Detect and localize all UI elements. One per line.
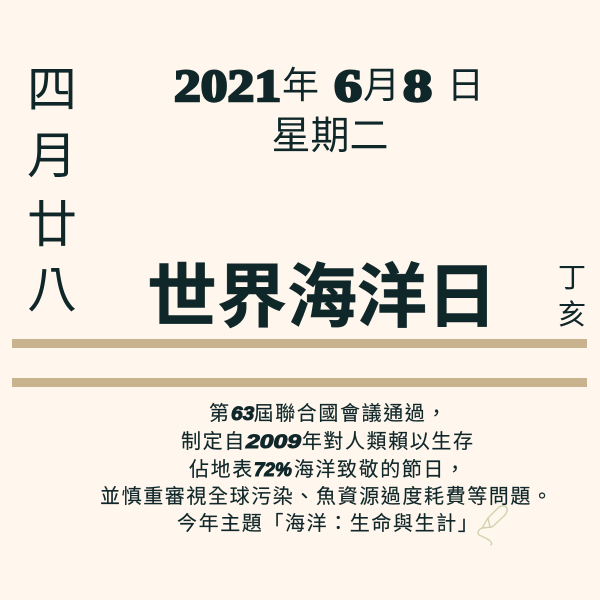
- description text: 72%: [254, 460, 292, 481]
- date line: 月: [363, 65, 400, 106]
- description text: 今年主題「海洋：生命與生計」: [177, 513, 479, 535]
- description text: 第 屆聯合國會議通過，: [209, 403, 448, 425]
- vertical lunar date: [27, 62, 77, 318]
- vertical lunar date: 廿: [27, 197, 77, 253]
- date line: 年: [282, 65, 319, 106]
- stem-branch year: 亥: [558, 299, 586, 330]
- description text: 並慎重審視全球污染、魚資源過度耗費等問題。: [100, 486, 554, 508]
- vertical lunar date: 月: [27, 128, 77, 184]
- vertical lunar date: 四: [27, 62, 77, 118]
- divider top: [12, 339, 587, 348]
- date line: 6: [334, 61, 362, 111]
- weekday: 星期二: [271, 115, 388, 158]
- stem-branch year: 丁: [558, 262, 586, 293]
- description text: 佔地表 海洋致敬的節日，: [189, 459, 467, 481]
- description text: 63: [231, 404, 254, 425]
- description text: 2009: [246, 432, 301, 453]
- icon: pencil doodle: [477, 505, 508, 546]
- date line: 8: [403, 61, 432, 111]
- vertical lunar date: 八: [27, 262, 77, 318]
- divider bottom: [12, 378, 587, 387]
- description text: 制定自 年對人類賴以生存: [181, 431, 475, 453]
- date line: 日: [447, 65, 484, 106]
- date line: [174, 61, 484, 111]
- description text: [100, 402, 554, 535]
- stem-branch year: [558, 262, 586, 330]
- title: 世界海洋日: [147, 241, 497, 342]
- date line: 2021: [174, 61, 281, 111]
